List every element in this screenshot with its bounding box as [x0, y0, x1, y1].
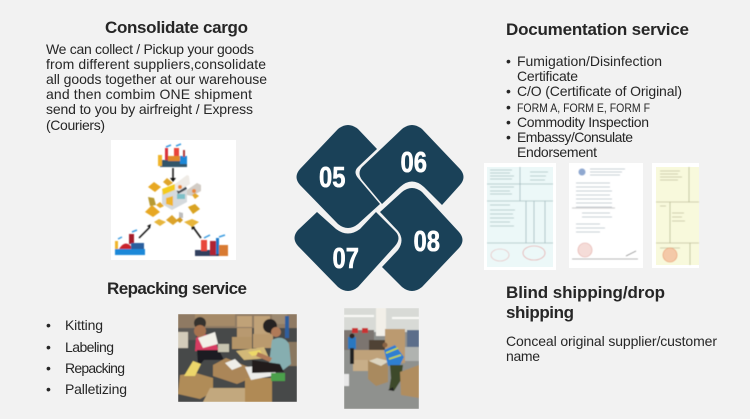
diamond 06 — [360, 125, 464, 205]
left factory — [115, 249, 145, 255]
diamond 08: 08 — [414, 225, 440, 258]
text block: consolidate description: all goods together at our warehouse — [46, 71, 267, 87]
icon: certificate 3 — [652, 163, 699, 268]
diamond 08 — [380, 188, 462, 291]
diamond 07: 07 — [332, 242, 359, 275]
heading: blind shipping — [506, 283, 665, 322]
text block: consolidate description — [46, 41, 267, 133]
heading: repacking service: Repacking service — [107, 279, 247, 298]
list: documentation items: FORM A, FORM E, FORM F — [517, 101, 650, 115]
heading: blind shipping: Blind shipping/drop — [506, 283, 665, 302]
list: repacking items: • — [46, 381, 51, 397]
list: repacking items: Kitting — [65, 317, 103, 333]
diamond 05 — [296, 125, 380, 228]
list: documentation items: Embassy/Consulate — [517, 129, 633, 145]
panel: documentation service — [484, 20, 699, 270]
seated worker right — [263, 319, 277, 333]
panel: repacking service — [46, 279, 419, 409]
list: repacking items: • — [46, 360, 51, 376]
text block: consolidate description: (Couriers) — [46, 117, 105, 133]
list: documentation items: • — [506, 114, 511, 130]
text block: consolidate description: from different suppliers,consolidate — [46, 56, 266, 72]
text block: blind shipping description: name — [506, 348, 540, 364]
list: repacking items — [46, 317, 127, 397]
text block: consolidate description: and then combim ONE shipment — [46, 86, 252, 102]
top factory — [160, 160, 187, 167]
list: repacking items: Palletizing — [65, 381, 127, 397]
text block: blind shipping description: Conceal original supplier/customer — [506, 333, 717, 349]
list: documentation items: C/O (Certificate of Original) — [517, 83, 682, 99]
panel: numbered diamonds — [294, 125, 464, 291]
list: documentation items: • — [506, 53, 511, 69]
heading: blind shipping: shipping — [506, 303, 574, 322]
boxes front — [178, 373, 213, 399]
icon: consolidation diagram — [111, 140, 236, 260]
list: documentation items: Endorsement — [517, 144, 597, 160]
photo: workers repacking boxes — [178, 314, 297, 402]
list: documentation items: • — [506, 129, 511, 145]
list: documentation items: Certificate — [517, 68, 578, 84]
list: documentation items: • — [506, 99, 511, 115]
cargo — [148, 182, 161, 192]
list: documentation items: Commodity Inspection — [517, 114, 649, 130]
heading: documentation service: Documentation service — [506, 20, 689, 39]
diamond 07 — [294, 212, 398, 291]
list: repacking items: • — [46, 339, 51, 355]
list: repacking items: • — [46, 317, 51, 333]
diamond 06: 06 — [400, 146, 427, 179]
icon: certificate 1 — [484, 163, 556, 270]
list: documentation items: Fumigation/Disinfection — [517, 53, 662, 69]
icon: certificate 2 — [569, 163, 643, 268]
list: repacking items: Repacking — [65, 360, 125, 376]
seated worker left — [195, 334, 219, 351]
list: repacking items: Labeling — [65, 339, 114, 355]
list: documentation items: • — [506, 83, 511, 99]
arrows — [172, 168, 174, 180]
right factory — [195, 250, 228, 256]
panel: blind shipping — [506, 283, 717, 364]
warehouse — [162, 186, 187, 210]
list: documentation items — [506, 53, 682, 160]
trucks — [175, 175, 190, 191]
heading: consolidate cargo: Consolidate cargo — [105, 18, 248, 37]
text block: consolidate description: send to you by airfreight / Express — [46, 101, 253, 117]
text block: consolidate description: We can collect / Pickup your goods — [46, 41, 254, 57]
diamond 05: 05 — [319, 161, 345, 194]
photo: warehouse worker — [344, 308, 419, 409]
panel: consolidate cargo — [46, 18, 267, 260]
text block: blind shipping description — [506, 333, 717, 364]
